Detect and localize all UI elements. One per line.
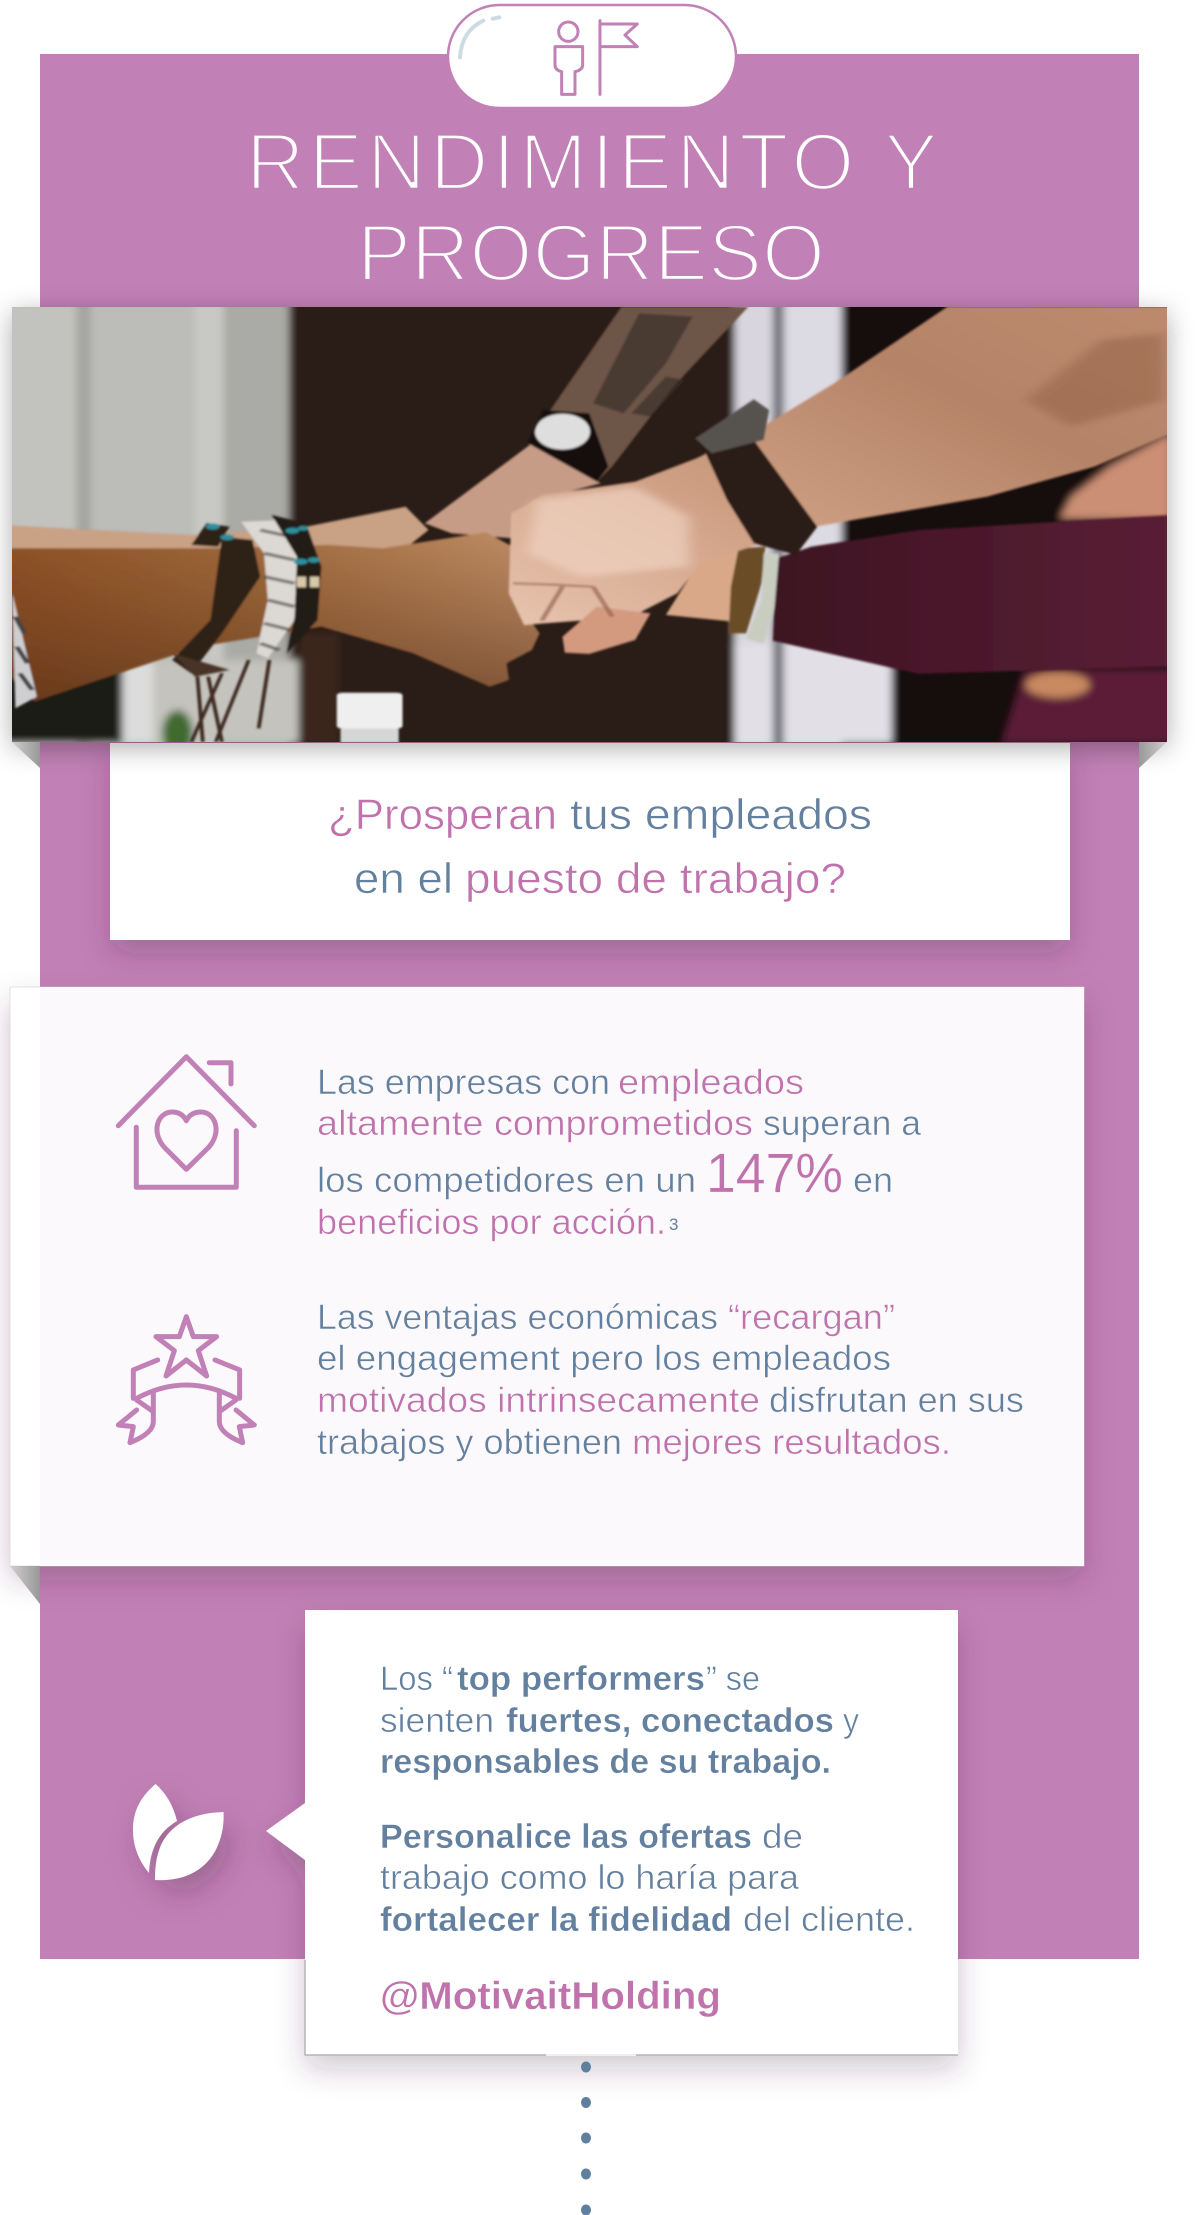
title — [246, 118, 938, 298]
question text: en el — [354, 855, 453, 903]
tattoo arm — [528, 307, 748, 482]
big watch — [703, 440, 817, 555]
question text: puesto de trabajo? — [465, 855, 846, 903]
text: economic advantages: disfrutan en sus — [769, 1381, 1024, 1420]
title: PROGRESO — [357, 208, 825, 298]
badge: person and flag icon — [448, 5, 736, 108]
photo: fist bump — [0, 300, 1194, 767]
text: personalise offers: de — [762, 1818, 803, 1856]
text: personalise offers — [380, 1818, 915, 1939]
fold: panel left — [10, 1566, 40, 1604]
fold: photo right — [1139, 742, 1167, 768]
text: company benefits — [317, 1063, 922, 1242]
text: personalise offers: fortalecer la fidelidad — [380, 1901, 732, 1939]
sleeve pattern — [12, 593, 37, 708]
dotted connector — [581, 2062, 591, 2215]
text: company benefits: 147% — [706, 1141, 843, 1204]
panel: callout — [266, 1610, 958, 2055]
question text — [328, 791, 872, 903]
text: top performers: y — [843, 1702, 859, 1740]
text: economic advantages: trabajos y obtienen — [317, 1423, 622, 1462]
text: top performers: ” se — [706, 1660, 760, 1698]
text: economic advantages: el engagement pero los empleados — [317, 1339, 891, 1378]
text: economic advantages: Las ventajas económicas — [317, 1298, 718, 1337]
text: personalise offers: trabajo como lo haría para — [380, 1859, 799, 1897]
fingers — [562, 607, 651, 654]
text: top performers: sienten — [380, 1702, 494, 1740]
text: top performers: Los “ — [380, 1660, 453, 1698]
small watch — [528, 410, 608, 482]
icon: star and ribbon — [118, 1317, 254, 1443]
gold bracelet — [729, 547, 765, 633]
text: company benefits: en — [853, 1161, 893, 1200]
left front arm — [0, 532, 540, 702]
text: company benefits: los competidores en un — [317, 1161, 696, 1200]
text: company benefits: altamente comprometidos — [317, 1104, 753, 1143]
question text: ¿Prosperan — [328, 791, 557, 839]
text: company benefits: Las empresas con — [317, 1063, 610, 1102]
text: top performers: responsables de su trabajo. — [380, 1743, 831, 1781]
text: top performers: top performers — [457, 1660, 705, 1698]
text: personalise offers: del cliente. — [743, 1901, 915, 1939]
text: economic advantages: mejores resultados. — [632, 1423, 951, 1462]
panel: question — [110, 743, 1070, 940]
text: company benefits: empleados — [618, 1063, 804, 1102]
arm shading — [1026, 333, 1163, 427]
bracelets — [172, 523, 260, 673]
text: company benefits: beneficios por acción. — [317, 1203, 666, 1242]
question text: tus empleados — [570, 791, 872, 839]
text: economic advantages: motivados intrinsecamente — [317, 1381, 760, 1420]
water bottle — [337, 693, 403, 729]
text: economic advantages: “recargan” — [728, 1298, 895, 1337]
icon: house with heart — [118, 1057, 254, 1187]
big arm — [509, 307, 1171, 625]
text: economic advantages — [317, 1298, 1024, 1462]
text: top performers — [380, 1660, 859, 1781]
hand behind — [425, 443, 601, 538]
text: company benefits: 3 — [669, 1215, 678, 1234]
maroon sleeve — [773, 515, 1171, 674]
text: top performers: fuertes, conectados — [506, 1702, 834, 1740]
title: RENDIMIENTO Y — [246, 118, 938, 208]
third wrist — [665, 550, 738, 623]
purple background panel — [40, 54, 1139, 1959]
text: personalise offers: Personalice las ofertas — [380, 1818, 752, 1856]
left back arm — [0, 507, 429, 552]
icon: leaves — [133, 1784, 224, 1880]
text: handle: @MotivaitHolding — [380, 1975, 721, 2018]
panel: engagement facts — [10, 987, 1084, 1566]
text: company benefits: superan a — [763, 1104, 922, 1143]
fold: photo left — [12, 742, 40, 768]
